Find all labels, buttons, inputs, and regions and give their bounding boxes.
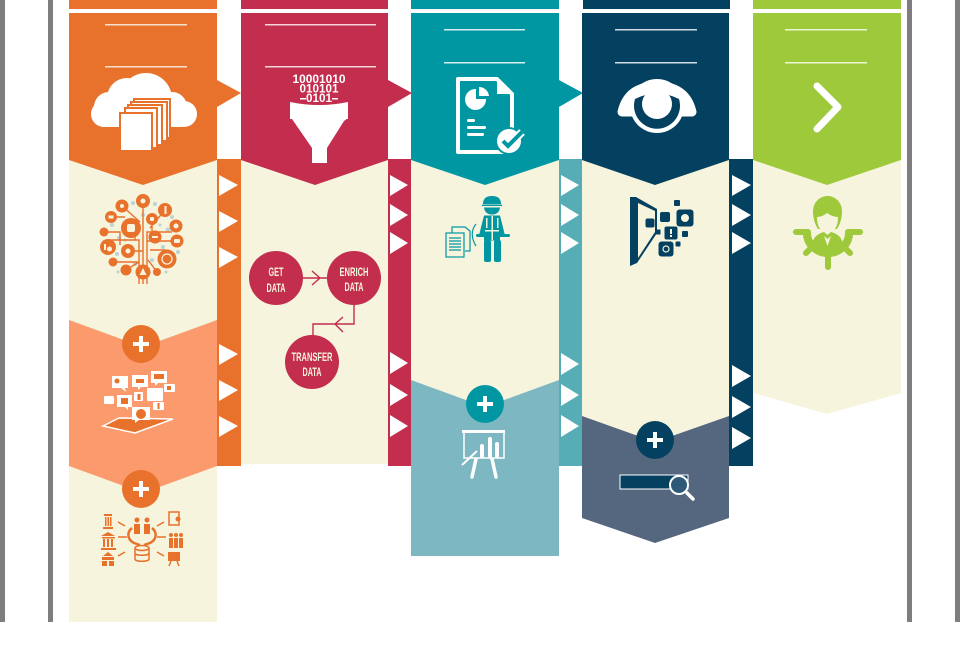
node: enrich data: ENRICH <box>340 265 368 279</box>
cream body <box>241 150 388 464</box>
icon: manager in gear <box>796 196 860 267</box>
cream body <box>582 150 729 446</box>
icon: cloud with documents <box>91 73 197 151</box>
icon: worker with documents <box>446 196 510 262</box>
strip arrows <box>561 175 579 437</box>
header ribbon <box>241 13 388 185</box>
funnel top rim <box>300 98 338 100</box>
peach section <box>69 320 217 493</box>
side strip <box>729 159 753 466</box>
icon: presentation board <box>462 430 505 477</box>
plus badge <box>122 470 160 508</box>
node: get data: GET <box>268 265 284 279</box>
icon: report with check <box>458 78 523 155</box>
header ribbon <box>69 13 217 185</box>
node: enrich data <box>327 251 381 305</box>
heading rules <box>444 29 525 64</box>
panel: column 2 crimson <box>241 0 412 466</box>
slate section <box>582 416 729 543</box>
strip arrows <box>219 175 238 437</box>
top bar <box>753 0 901 9</box>
icon: people and data hands <box>101 512 183 566</box>
connector arrow <box>388 80 412 107</box>
panel: column 4 navy <box>582 0 753 543</box>
icon: chevron <box>817 86 838 129</box>
plus badge <box>636 421 674 459</box>
side strip <box>388 159 411 466</box>
heading rules <box>105 24 187 68</box>
header ribbon <box>582 13 729 185</box>
cream body <box>411 150 559 412</box>
heading rules <box>785 29 867 64</box>
node: get data <box>249 251 303 305</box>
top bar <box>583 0 730 9</box>
connector enrich to transfer <box>313 300 354 338</box>
connector arrow <box>559 80 583 107</box>
top bar <box>69 0 217 9</box>
strip arrows <box>390 175 408 437</box>
flow: get, enrich, transfer <box>249 251 381 389</box>
node: get data: DATA <box>266 281 286 295</box>
binary digits: 10001010 <box>292 72 346 86</box>
node: transfer data <box>285 335 339 389</box>
strip arrows <box>732 175 751 449</box>
icon: door with data tiles <box>630 197 694 266</box>
header ribbon <box>753 13 901 185</box>
node: enrich data: DATA <box>344 280 364 294</box>
top bar <box>411 0 559 9</box>
heading rules <box>265 24 376 68</box>
panel: column 1 orange <box>69 0 241 622</box>
node: transfer data: DATA <box>302 365 322 379</box>
heading rules <box>615 29 697 64</box>
connector arrow <box>217 80 241 107</box>
cream body <box>753 150 901 414</box>
plus badge <box>466 385 504 423</box>
icon: tablet with speech bubbles <box>103 371 175 433</box>
icon: eye <box>622 79 692 133</box>
icon: data funnel <box>290 72 348 163</box>
icon: social media tree <box>100 194 184 284</box>
panel: column 3 teal <box>411 0 583 556</box>
funnel <box>290 102 348 163</box>
header ribbon <box>411 13 559 185</box>
binary digits: 0101 <box>306 91 332 105</box>
node: transfer data: TRANSFER <box>292 350 333 364</box>
light teal section <box>411 380 559 556</box>
panel: column 5 green <box>753 0 901 414</box>
connector get to enrich <box>300 271 328 285</box>
cream body <box>69 150 217 622</box>
side strip <box>217 159 241 466</box>
top bar <box>241 0 388 9</box>
plus badge <box>122 325 160 363</box>
side strip <box>559 159 582 466</box>
binary digits: 010101 <box>300 82 339 96</box>
icon: search bar <box>620 475 693 499</box>
